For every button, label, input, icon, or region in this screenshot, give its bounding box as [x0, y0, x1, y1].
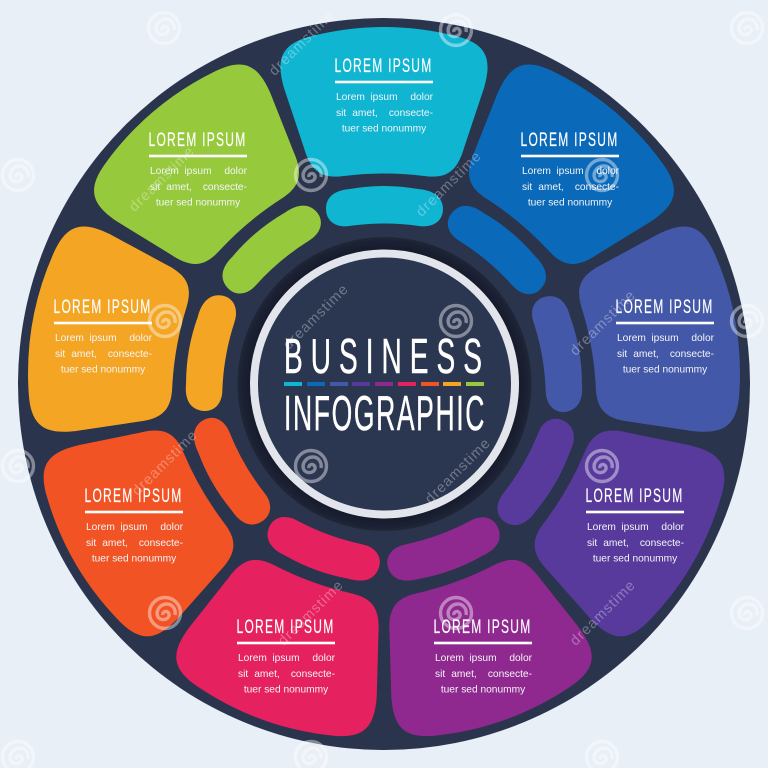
cyan text: amet, [352, 108, 378, 119]
red-orange capsule [183, 412, 276, 533]
pink text: consecte- [291, 669, 335, 680]
green text: consecte- [203, 182, 247, 193]
cyan text: sit [336, 108, 346, 119]
watermark: dreamstime [275, 577, 347, 649]
green text: Lorem [150, 166, 179, 177]
cyan text: tuer sed nonummy [342, 124, 427, 134]
blue text: sit [522, 182, 532, 193]
indigo capsule [529, 292, 589, 415]
violet text: dolor [661, 522, 685, 533]
cyan text: Lorem [336, 92, 365, 103]
magenta text [434, 617, 533, 696]
violet text: tuer sed nonummy [593, 554, 678, 564]
cyan text [334, 56, 434, 134]
indigo text: tuer sed nonummy [623, 364, 708, 376]
pink text: ipsum [272, 653, 300, 664]
watermark: dreamstime [422, 435, 494, 507]
orange text: LOREM IPSUM [54, 297, 152, 318]
magenta block [358, 543, 603, 755]
red-orange text: consecte- [139, 538, 183, 549]
cyan text: dolor [410, 92, 434, 103]
violet text: sit [587, 538, 597, 549]
panel: blue segment [438, 44, 693, 301]
indigo text: LOREM IPSUM [616, 297, 714, 318]
pink text: Lorem [238, 653, 267, 664]
magenta text: LOREM IPSUM [434, 617, 532, 638]
violet text: ipsum [621, 522, 649, 533]
orange capsule [179, 292, 239, 414]
cyan text: LOREM IPSUM [334, 56, 432, 77]
watermark: dreamstime [129, 427, 201, 499]
panel: indigo segment [529, 220, 754, 450]
cyan capsule [326, 186, 443, 226]
magenta text: Lorem [435, 653, 464, 664]
magenta text: sit [435, 669, 445, 680]
pink text: tuer sed nonummy [244, 684, 329, 696]
blue text: tuer sed nonummy [528, 198, 613, 208]
violet text [586, 486, 685, 564]
green text: sit [150, 182, 160, 193]
magenta text: ipsum [469, 653, 497, 664]
blue capsule [441, 195, 556, 301]
orange text: ipsum [89, 333, 117, 344]
cyan text: ipsum [370, 92, 398, 103]
panel: green segment [75, 44, 330, 301]
panel: magenta segment [358, 512, 603, 755]
pink text: dolor [312, 653, 336, 664]
green block [75, 44, 330, 292]
violet block [512, 398, 745, 652]
blue text [520, 130, 620, 208]
blue text: ipsum [556, 166, 584, 177]
panel: orange segment [14, 220, 239, 450]
panel: red-orange segment [23, 398, 276, 652]
blue block [438, 44, 693, 292]
violet text: amet, [603, 538, 629, 549]
orange text [54, 297, 153, 376]
title: infographic: INFOGRAPHIC [284, 387, 486, 441]
green text: amet, [166, 182, 192, 193]
indigo text: sit [617, 349, 627, 360]
pink text: sit [238, 669, 248, 680]
red-orange text: Lorem [86, 522, 115, 533]
blue text: dolor [596, 166, 620, 177]
red-orange text [84, 486, 184, 564]
pink capsule [261, 512, 385, 590]
magenta text: consecte- [488, 669, 532, 680]
indigo text: ipsum [651, 333, 679, 344]
pink block [165, 543, 410, 755]
colour dash divider [284, 382, 484, 386]
dark halo ring [238, 237, 532, 531]
magenta text: tuer sed nonummy [441, 684, 526, 696]
orange text: amet, [71, 349, 97, 360]
red-orange text: LOREM IPSUM [84, 486, 182, 507]
watermark: dreamstime [280, 281, 352, 353]
green text: ipsum [184, 166, 212, 177]
indigo text: consecte- [670, 349, 714, 360]
watermark: dreamstime [567, 287, 639, 359]
magenta text: dolor [509, 653, 533, 664]
title: business: BUSINESS [284, 330, 490, 384]
violet text: Lorem [587, 522, 616, 533]
violet text: consecte- [640, 538, 684, 549]
orange text: Lorem [55, 333, 84, 344]
indigo block [570, 220, 754, 450]
centre badge [238, 237, 532, 531]
indigo text: Lorem [617, 333, 646, 344]
red-orange text: tuer sed nonummy [92, 554, 177, 564]
violet text: LOREM IPSUM [586, 486, 684, 507]
pink text: LOREM IPSUM [236, 617, 334, 638]
panel: pink segment [165, 512, 410, 755]
pink text: amet, [254, 669, 280, 680]
orange text: consecte- [108, 349, 152, 360]
watermark: dreamstime [567, 577, 639, 649]
indigo text [616, 297, 715, 376]
blue text: LOREM IPSUM [520, 130, 618, 151]
indigo text: dolor [691, 333, 715, 344]
orange block [14, 220, 198, 450]
blue text: Lorem [522, 166, 551, 177]
white ring [254, 254, 515, 514]
watermark: dreamstime [266, 7, 338, 79]
cyan block [280, 27, 488, 177]
orange text: tuer sed nonummy [61, 364, 146, 376]
magenta text: amet, [451, 669, 477, 680]
panel: violet segment [491, 398, 745, 652]
green text: LOREM IPSUM [148, 130, 246, 151]
red-orange text: dolor [160, 522, 184, 533]
green text: tuer sed nonummy [156, 198, 241, 208]
blue text: amet, [538, 182, 564, 193]
violet capsule [491, 413, 584, 534]
green text [148, 130, 248, 208]
green text: dolor [224, 166, 248, 177]
cyan text: consecte- [389, 108, 433, 119]
watermark: dreamstime [413, 148, 485, 220]
red-orange text: sit [86, 538, 96, 549]
red-orange text: ipsum [120, 522, 148, 533]
green capsule [212, 194, 328, 301]
red-orange block [23, 398, 256, 652]
orange text: sit [55, 349, 65, 360]
orange text: dolor [129, 333, 153, 344]
magenta capsule [382, 512, 506, 590]
panel: cyan segment [280, 27, 488, 226]
indigo text: amet, [633, 349, 659, 360]
blue text: consecte- [575, 182, 619, 193]
red-orange text: amet, [102, 538, 128, 549]
pink text [236, 617, 336, 696]
watermark: dreamstime [126, 143, 198, 215]
